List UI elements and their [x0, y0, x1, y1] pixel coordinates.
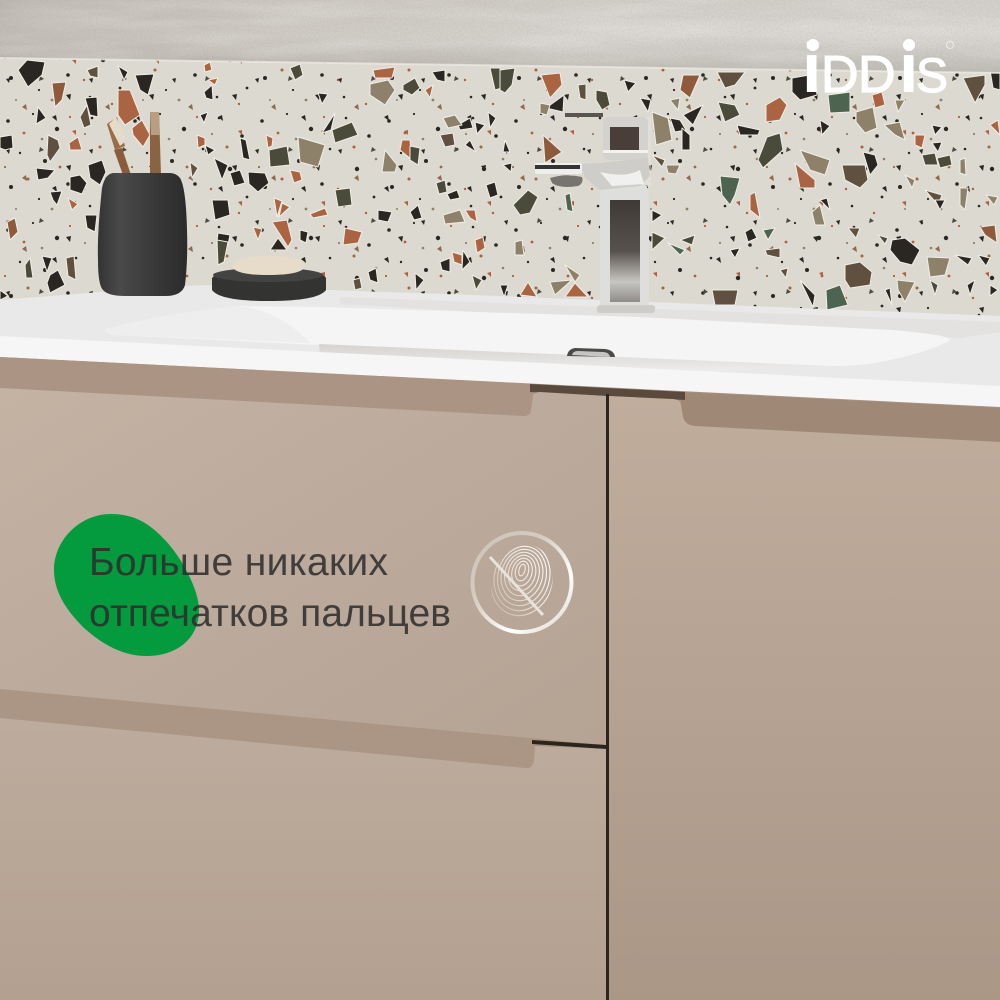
chrome faucet: [535, 113, 655, 313]
lower drawer front: [0, 718, 606, 1000]
top drawer front: [0, 388, 606, 745]
logo: [802, 29, 954, 107]
faucet column: [600, 178, 649, 306]
basin rim reflection: [319, 344, 829, 372]
logo: i: [802, 29, 821, 107]
toothbrushes: [107, 112, 161, 175]
icon: no fingerprints: [472, 526, 572, 634]
faucet nozzle: [550, 175, 582, 187]
counter reflections: [340, 297, 1000, 338]
basin: [105, 306, 950, 366]
counter front edge: [0, 336, 1000, 408]
heading: отпечатков пальцев: [89, 592, 451, 635]
prohibition slash: [490, 557, 543, 615]
logo: S: [916, 50, 948, 103]
cabinet backing: [0, 357, 1000, 1000]
drain: [567, 348, 615, 357]
soap: [232, 256, 305, 275]
fingerprint: [491, 546, 553, 616]
heading: Больше никаких: [89, 541, 388, 584]
green blob: [54, 514, 199, 656]
faucet cap: [603, 117, 648, 160]
lower drawer recess: [0, 689, 537, 772]
basin shadow: [105, 306, 310, 343]
vertical cabinet gap: [606, 394, 609, 1000]
top drawer recess: [0, 357, 535, 420]
logo: D: [821, 46, 859, 104]
faucet neck sleeve: [640, 117, 651, 187]
faucet lever: [535, 163, 582, 174]
horizontal drawer gap: [532, 740, 606, 749]
soap dish: [212, 256, 326, 301]
counter top: [0, 285, 1000, 408]
logo: D: [858, 46, 896, 104]
backsplash top edge highlight: [0, 57, 1000, 74]
logo: i: [899, 29, 918, 107]
prohibition ring: [472, 533, 572, 632]
black cup: [98, 173, 187, 296]
faucet base: [597, 305, 655, 313]
faucet spout: [580, 158, 650, 190]
right door front: [609, 396, 1000, 1000]
dark strip between drawer and door tops: [530, 384, 685, 400]
plaster wall: [0, 0, 1000, 80]
terrazzo backsplash: [0, 50, 1000, 330]
right door recess: [681, 392, 1000, 445]
faucet column dark centre: [610, 200, 640, 302]
